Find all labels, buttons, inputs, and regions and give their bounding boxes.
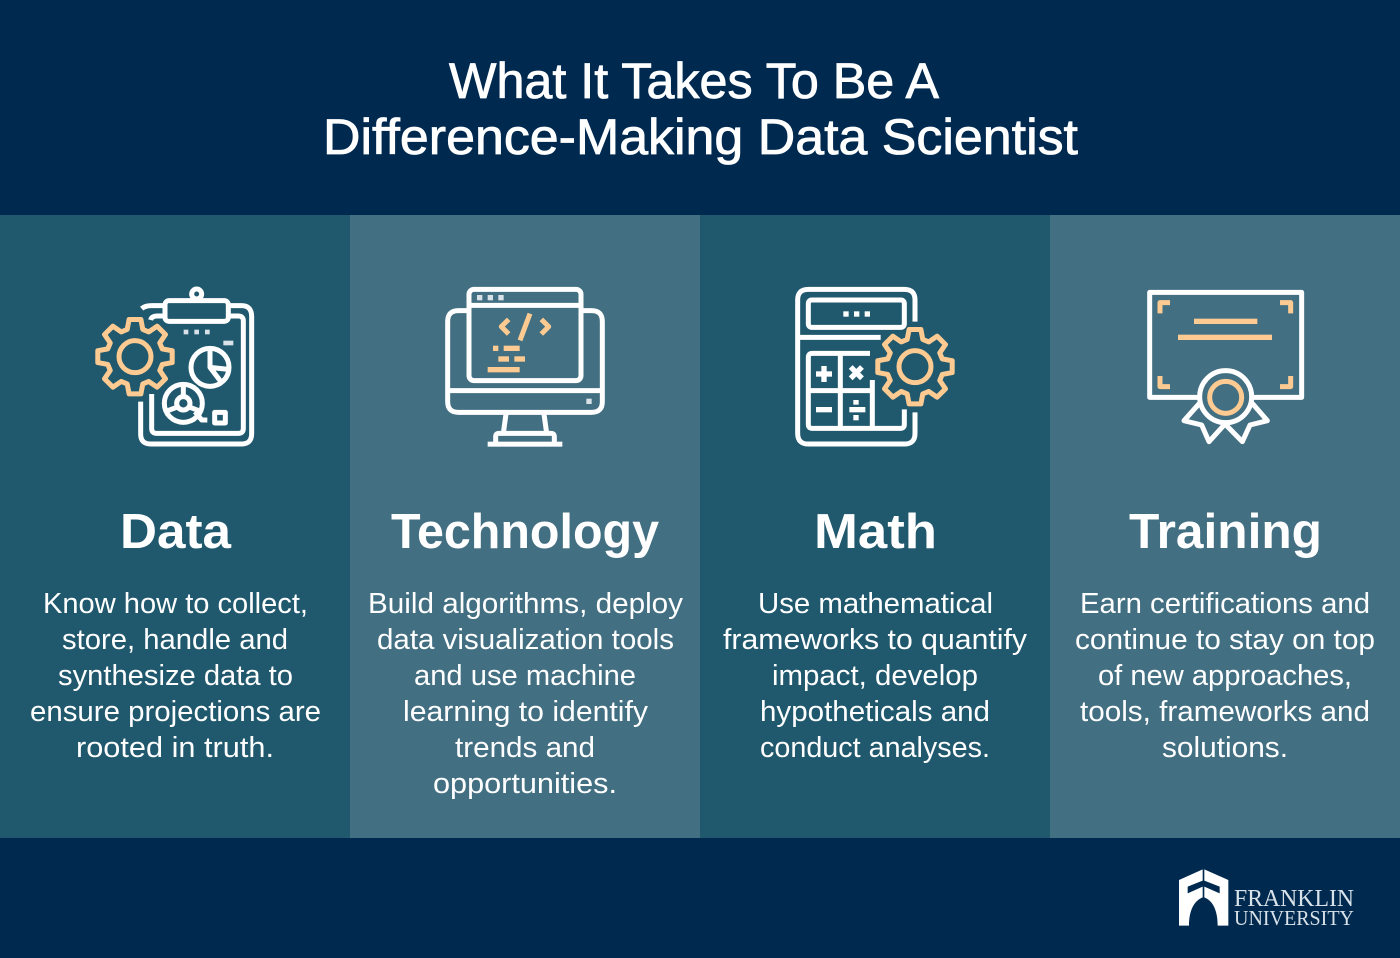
text: math description: Use mathematical [758,588,993,620]
text: math description [723,588,1028,764]
text: wordmark: FRANKLIN [1234,886,1354,912]
text: math description: conduct analyses. [760,732,990,764]
text: technology description: trends and [455,732,595,764]
heading: training: Training [1129,505,1322,559]
icon: certificate with seal [1150,292,1302,442]
text: training description: Earn certifications and [1080,588,1370,620]
text: data description: synthesize data to [58,660,293,692]
text: data description: rooted in truth. [76,732,274,764]
logo: Franklin University [1179,869,1354,930]
text: technology description: learning to identify [403,696,649,728]
text: data description [30,588,321,764]
text: training description: solutions. [1162,732,1288,764]
text: wordmark: UNIVERSITY [1234,906,1354,930]
text: technology description: opportunities. [433,768,617,800]
title: Difference-Making Data Scientist [323,109,1078,165]
text: training description: of new approaches, [1098,660,1352,692]
text: data description: store, handle and [62,624,288,656]
panel: math [700,215,1050,838]
text: math description: hypotheticals and [760,696,990,728]
panel: training [1050,215,1400,838]
icon: Franklin arch mark [1179,869,1228,926]
heading: data: Data [120,505,232,559]
panel: data [0,215,350,838]
icon: monitor with code window [448,289,602,447]
panel: technology [350,215,700,838]
text: math description: impact, develop [772,660,978,692]
heading: technology: Technology [391,505,659,559]
title: What It Takes To Be A [449,53,940,109]
icon: calculator with gear [798,289,952,444]
text: training description [1075,588,1375,764]
text: training description: tools, frameworks and [1080,696,1370,728]
text: technology description: and use machine [414,660,636,692]
text: technology description [368,588,684,800]
text: technology description: data visualization tools [377,624,674,656]
text: training description: continue to stay on top [1075,624,1375,656]
title [323,53,1078,165]
icon: clipboard with gear and charts [98,289,252,444]
text: technology description: Build algorithms, deploy [368,588,684,620]
text: math description: frameworks to quantify [723,624,1028,656]
heading: math: Math [814,505,937,559]
text: wordmark [1234,886,1354,930]
text: data description: ensure projections are [30,696,321,728]
text: data description: Know how to collect, [43,588,308,620]
